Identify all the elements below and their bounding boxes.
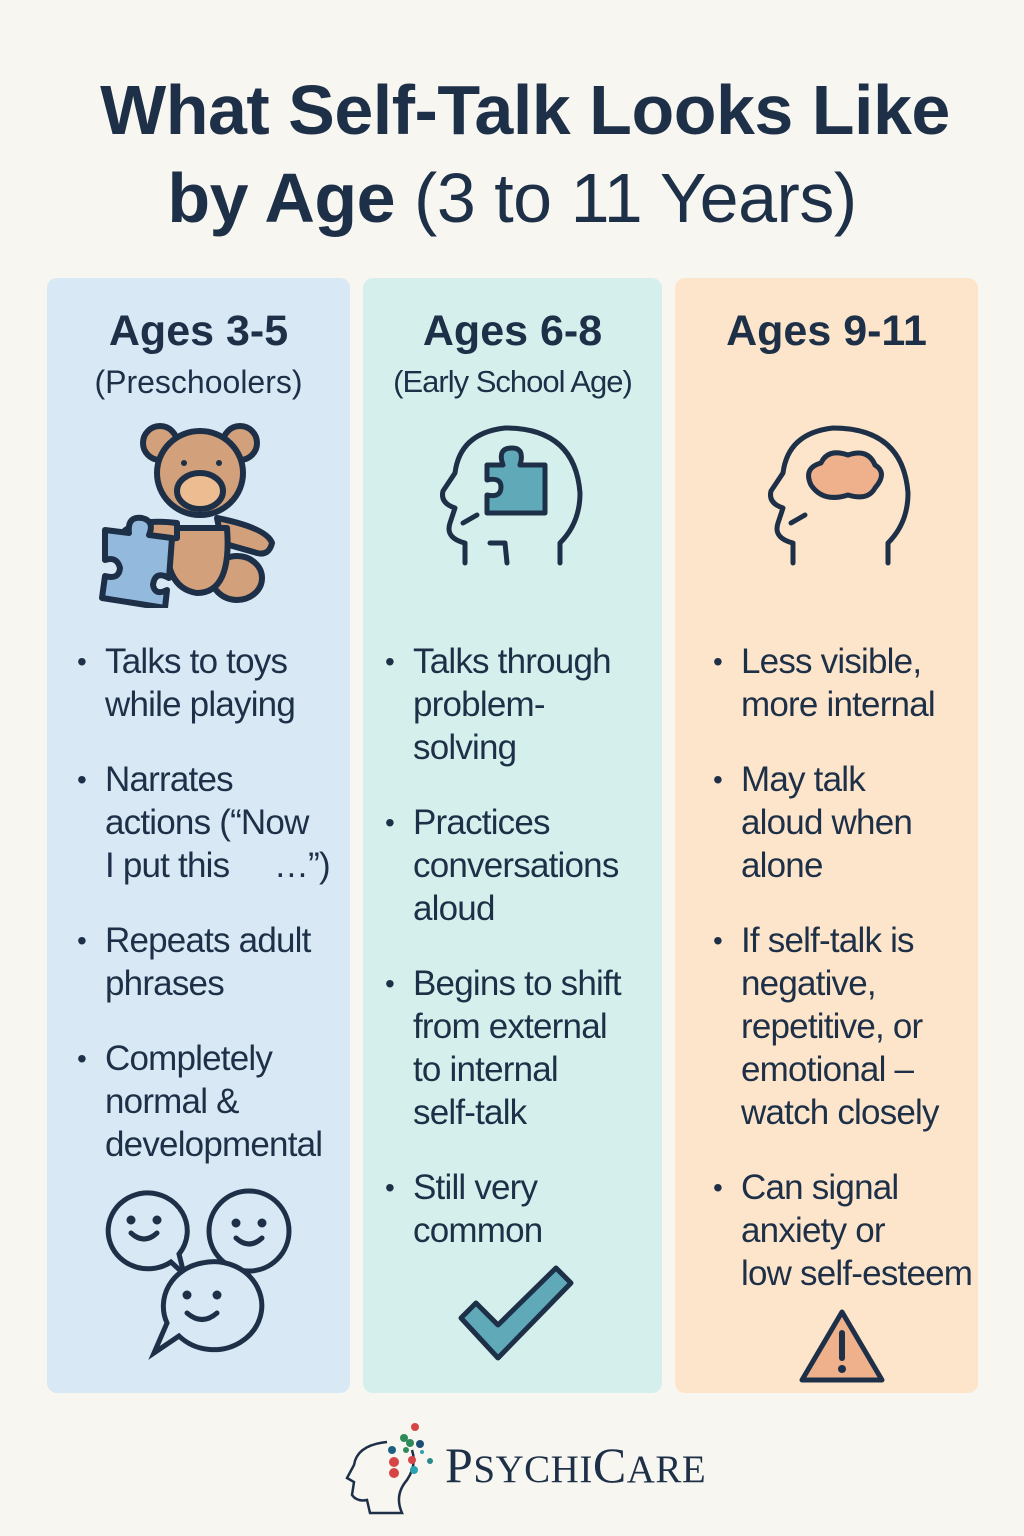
icon: head with dots	[345, 1423, 433, 1514]
bullet list: to internal	[413, 1050, 558, 1089]
bullet list: while playing	[105, 685, 295, 724]
logo: PsychiCare	[345, 1423, 706, 1514]
bullet list: actions (“Now	[105, 803, 309, 842]
bullet list: from external	[413, 1007, 607, 1046]
bullet list: Talks to toys	[105, 642, 287, 681]
title: What Self-Talk Looks Like	[100, 71, 950, 149]
bullet list: aloud when	[741, 803, 912, 842]
bullet list: I put this …”)	[105, 846, 330, 885]
icon: head with brain	[768, 426, 910, 566]
panel: ages 9-11	[675, 278, 978, 1393]
bullet list: anxiety or	[741, 1211, 885, 1250]
bullet list: Repeats adult	[105, 921, 311, 960]
bullet list: self-talk	[413, 1093, 526, 1132]
bullet list: If self-talk is	[741, 921, 914, 960]
bullet list: Practices	[413, 803, 550, 842]
bullet list: Still very	[413, 1168, 537, 1207]
bullet list: Begins to shift	[413, 964, 621, 1003]
bullet list	[78, 642, 330, 1164]
icon: warning triangle	[800, 1310, 884, 1382]
bullet list: Can signal	[741, 1168, 898, 1207]
icon: check mark	[458, 1266, 574, 1360]
bullet list: aloud	[413, 889, 495, 928]
panel: ages 6-8	[363, 278, 662, 1393]
subheading: (Early School Age)	[393, 364, 632, 399]
bullet list: phrases	[105, 964, 224, 1003]
heading: Ages 9-11	[726, 307, 927, 355]
bullet list: solving	[413, 728, 516, 767]
panel: ages 3-5	[47, 278, 350, 1393]
bullet list: watch closely	[741, 1093, 939, 1132]
bullet list: negative,	[741, 964, 876, 1003]
subheading: (Preschoolers)	[94, 364, 303, 400]
bullet list	[714, 642, 972, 1293]
bullet list: Completely	[105, 1039, 272, 1078]
bullet list	[386, 642, 622, 1250]
icon: teddy bear with puzzle	[99, 423, 275, 608]
bullet list: repetitive, or	[741, 1007, 922, 1046]
bullet list: common	[413, 1211, 542, 1250]
bullet list: problem-	[413, 685, 545, 724]
bullet list: Narrates	[105, 760, 233, 799]
title: by Age (3 to 11 Years)	[167, 159, 857, 237]
bullet list: Talks through	[413, 642, 611, 681]
bullet list: alone	[741, 846, 823, 885]
bullet list: more internal	[741, 685, 935, 724]
icon: head with puzzle piece	[440, 426, 582, 566]
heading: Ages 6-8	[423, 307, 602, 355]
bullet list: Less visible,	[741, 642, 921, 681]
title	[100, 71, 950, 237]
heading: Ages 3-5	[109, 307, 288, 355]
bullet list: developmental	[105, 1125, 322, 1164]
bullet list: conversations	[413, 846, 619, 885]
bullet list: normal &	[105, 1082, 239, 1121]
bullet list: May talk	[741, 760, 865, 799]
bullet list: low self-esteem	[741, 1254, 972, 1293]
logo text: PSYCHICARE	[445, 1437, 706, 1493]
icon: smiling speech bubbles	[106, 1188, 292, 1360]
bullet list: emotional –	[741, 1050, 913, 1089]
